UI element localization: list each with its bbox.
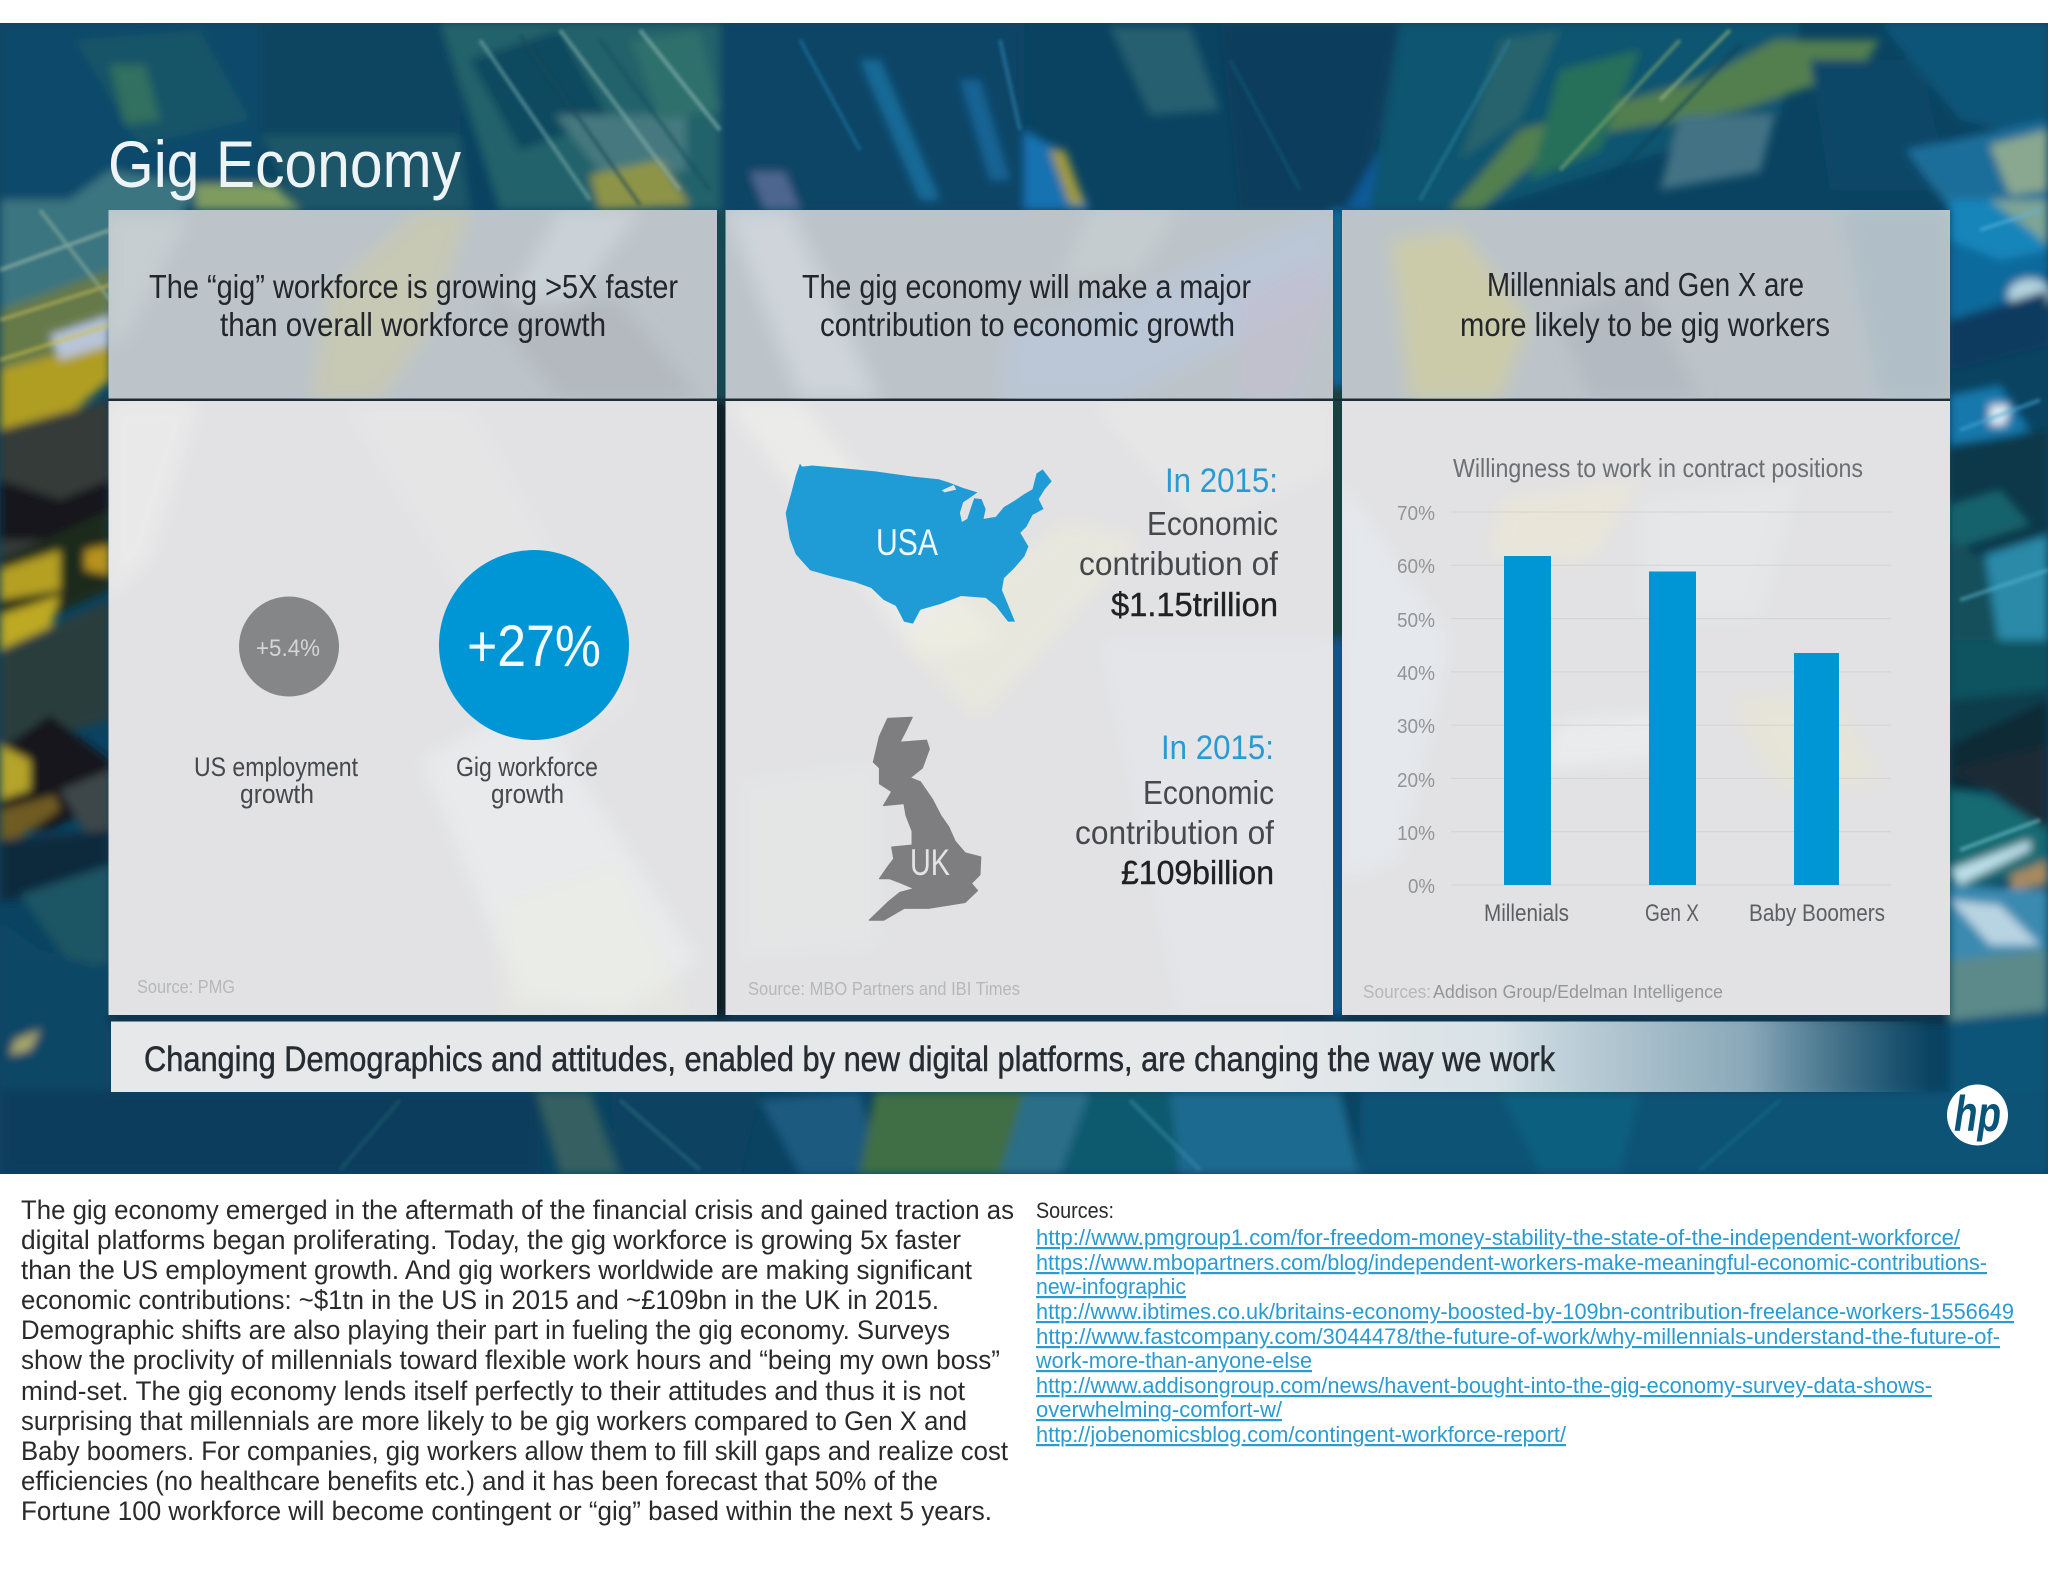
panel heading: more likely to be gig workers (1460, 306, 1830, 343)
y axis labels: 30% (1397, 716, 1435, 738)
circle: gig workforce growth (439, 550, 629, 740)
map: USA: USA (876, 522, 938, 563)
sources list (1035, 1198, 2014, 1447)
map: USA (786, 463, 1052, 624)
sources list: http://www.ibtimes.co.uk/britains-economy-boosted-by-109bn-contribution-freelance-workers-1556649 (1036, 1299, 2014, 1324)
text: USA contribution: contribution of (1079, 545, 1279, 582)
icon: HP logo: hp (1954, 1086, 2001, 1142)
text: UK contribution: Economic (1143, 774, 1274, 811)
panel heading: The “gig” workforce is growing >5X faster (149, 268, 678, 305)
label: gig workforce growth: Gig workforce (456, 752, 598, 782)
map: UK (869, 717, 981, 920)
background: aerial city photograph (0, 23, 2048, 1174)
y axis labels: 60% (1397, 556, 1435, 578)
y axis labels: 50% (1397, 610, 1435, 632)
sources list: Sources: (1036, 1198, 1114, 1223)
y axis labels: 70% (1397, 503, 1435, 525)
panel: economic contribution (748, 268, 1279, 999)
source note: Sources: (1363, 982, 1431, 1002)
bar chart (1397, 503, 1891, 927)
body paragraph: mind-set. The gig economy lends itself perfectly to their attitudes and thus it is not (21, 1376, 965, 1406)
source note: Source: PMG (137, 977, 235, 997)
panel backgrounds (108, 210, 1950, 1015)
y axis labels: 10% (1397, 823, 1435, 845)
bars (1504, 556, 1839, 885)
x axis labels: Gen X (1645, 900, 1699, 927)
x axis labels: Millenials (1484, 900, 1569, 927)
circle: US employment growth: +5.4% (256, 635, 320, 662)
title: Gig Economy (108, 127, 461, 201)
body paragraph: than the US employment growth. And gig workers worldwide are making significant (21, 1255, 972, 1285)
text: USA contribution: Economic (1147, 505, 1278, 542)
panel: generational willingness (1363, 266, 1891, 1002)
bottom takeaway bar (111, 1022, 1931, 1092)
body paragraph: Fortune 100 workforce will become contingent or “gig” based within the next 5 years. (21, 1496, 992, 1526)
label: US employment growth (194, 752, 358, 809)
circle: gig workforce growth: +27% (467, 614, 601, 679)
body paragraph: Demographic shifts are also playing their part in fueling the gig economy. Surveys (21, 1315, 950, 1345)
text: UK contribution: In 2015: (1161, 729, 1274, 767)
source note: Source: MBO Partners and IBI Times (748, 979, 1020, 999)
body paragraph: show the proclivity of millennials toward flexible work hours and “being my own boss” (21, 1345, 1000, 1375)
sources list: http://www.addisongroup.com/news/havent-bought-into-the-gig-economy-survey-data-shows- (1036, 1373, 1932, 1398)
sources list: http://www.fastcompany.com/3044478/the-future-of-work/why-millennials-understand-the-future-of- (1036, 1324, 2000, 1349)
panel heading: Millennials and Gen X are (1487, 266, 1804, 303)
circle: US employment growth (239, 596, 339, 696)
x axis labels: Baby Boomers (1749, 900, 1885, 927)
panel heading (802, 268, 1251, 343)
body paragraph: efficiencies (no healthcare benefits etc.) and it has been forecast that 50% of the (21, 1466, 938, 1496)
source note: Addison Group/Edelman Intelligence (1433, 982, 1723, 1002)
text: USA contribution: $1.15trillion (1111, 586, 1278, 623)
panel heading (149, 268, 678, 343)
y axis labels: 40% (1397, 663, 1435, 685)
label: gig workforce growth: growth (491, 779, 564, 809)
panel: gig workforce growth (137, 268, 678, 997)
y axis labels: 20% (1397, 770, 1435, 792)
text: USA contribution (1079, 462, 1279, 623)
body paragraph: surprising that millennials are more likely to be gig workers compared to Gen X and (21, 1406, 967, 1436)
y axis labels: 0% (1408, 876, 1435, 898)
body paragraph: digital platforms began proliferating. Today, the gig workforce is growing 5x faster (21, 1225, 961, 1255)
sources list: http://www.pmgroup1.com/for-freedom-money-stability-the-state-of-the-independent-workforce/ (1036, 1225, 1961, 1250)
sources list: https://www.mbopartners.com/blog/independent-workers-make-meaningful-economic-contributions- (1036, 1250, 1987, 1275)
label: US employment growth: growth (240, 779, 314, 809)
x axis labels (1484, 900, 1885, 927)
text: UK contribution: contribution of (1075, 814, 1275, 851)
chart title: Willingness to work in contract positions (1453, 453, 1863, 483)
body paragraph: The gig economy emerged in the aftermath of the financial crisis and gained traction as (21, 1195, 1014, 1225)
label: gig workforce growth (456, 752, 598, 809)
y axis labels (1397, 503, 1435, 898)
map: UK: UK (910, 842, 950, 883)
sources list: http://jobenomicsblog.com/contingent-workforce-report/ (1036, 1422, 1567, 1447)
panel heading: than overall workforce growth (220, 306, 606, 343)
body paragraph: economic contributions: ~$1tn in the US in 2015 and ~£109bn in the UK in 2015. (21, 1285, 939, 1315)
sources list: work-more-than-anyone-else (1035, 1348, 1312, 1373)
sources list: overwhelming-comfort-w/ (1036, 1397, 1283, 1422)
panel heading: The gig economy will make a major (802, 268, 1251, 305)
bottom takeaway bar: Changing Demographics and attitudes, enabled by new digital platforms, are changing the way we work (144, 1040, 1555, 1079)
text: UK contribution (1075, 729, 1275, 891)
body paragraph: Baby boomers. For companies, gig workers allow them to fill skill gaps and realize cost (21, 1436, 1008, 1466)
label: US employment growth: US employment (194, 752, 358, 782)
body paragraph (21, 1195, 1014, 1526)
text: USA contribution: In 2015: (1165, 462, 1278, 500)
sources list: new-infographic (1036, 1274, 1186, 1299)
panel heading: contribution to economic growth (820, 306, 1235, 343)
text: UK contribution: £109billion (1121, 854, 1274, 891)
panel heading (1460, 266, 1830, 343)
